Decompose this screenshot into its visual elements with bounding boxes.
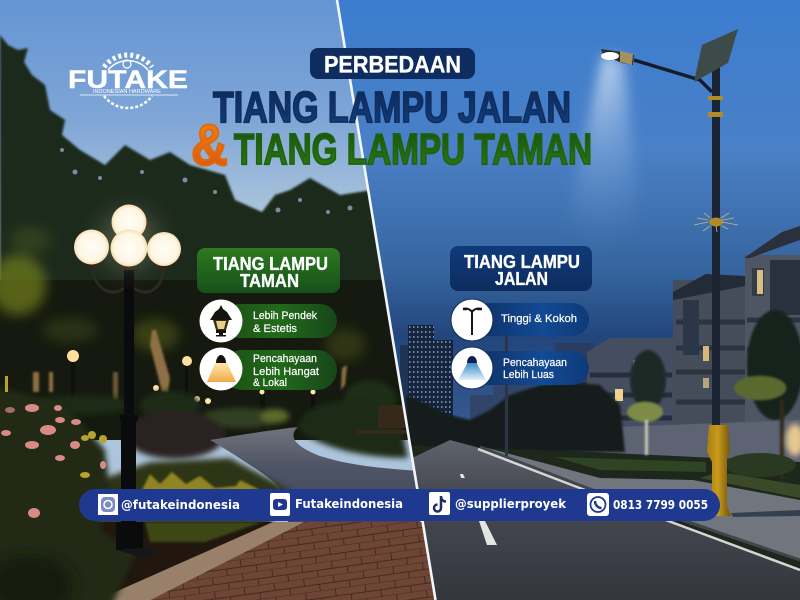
second street pole in distance — [505, 336, 508, 456]
beam of light — [574, 48, 636, 219]
curved garden path — [210, 427, 420, 525]
perimeter wall — [590, 420, 800, 462]
logo wordmark: FUTAKE — [68, 66, 188, 94]
taman row: lebih pendek — [200, 300, 337, 342]
title ampersand: & — [191, 113, 228, 178]
jalan row: tinggi — [451, 299, 589, 341]
lamp head — [601, 49, 634, 65]
sidewalk — [480, 446, 800, 560]
glowing globes — [74, 204, 181, 270]
distant skyline — [400, 325, 595, 430]
front apartment building — [744, 226, 800, 440]
icon: street pole — [463, 309, 482, 335]
foreground trees — [627, 310, 800, 480]
lane dashes — [460, 474, 497, 545]
jalan header: JALAN — [495, 269, 548, 289]
whatsapp contact: 0813 7799 0055 — [613, 497, 708, 512]
logo gear — [80, 55, 178, 108]
instagram contact — [98, 494, 240, 515]
taman header: TIANG LAMPU — [213, 254, 328, 274]
spider ornament — [694, 213, 738, 232]
soil bed — [96, 522, 273, 593]
tall apartment building — [673, 274, 745, 440]
asphalt road — [412, 440, 800, 600]
taman row: pencahayaan: & Lokal — [253, 377, 287, 389]
mid apartment building — [587, 338, 673, 427]
tiktok contact — [429, 492, 567, 515]
taman row: pencahayaan: Lebih Hangat — [253, 366, 319, 378]
lamp arm — [634, 60, 712, 92]
road edge line — [478, 449, 800, 570]
solar street lamp — [601, 29, 800, 517]
yellow flower sprigs — [5, 376, 107, 478]
jalan row: tinggi: Tinggi & Kokoh — [501, 313, 577, 325]
lower dark foliage — [0, 280, 420, 440]
sky gaps in the canopy — [60, 148, 352, 214]
icon: warm light cone — [207, 355, 236, 382]
panel: Tiang Lampu Taman — [197, 248, 340, 390]
taman row: pencahayaan: Pencahayaan — [253, 353, 317, 365]
panel: street photo background — [330, 0, 800, 600]
flower bush — [0, 385, 135, 600]
gold base — [707, 425, 731, 516]
instagram contact: @futakeindonesia — [121, 497, 240, 512]
contact bar — [79, 489, 720, 521]
yellow bush highlights — [141, 471, 260, 489]
far trees — [406, 382, 625, 452]
hedges — [30, 380, 396, 459]
icon: cool light cone — [458, 356, 486, 380]
jalan header — [450, 246, 592, 291]
walkway curb — [97, 522, 304, 600]
title line 2: TIANG LAMPU TAMAN — [234, 125, 592, 174]
taman header: TAMAN — [240, 271, 299, 291]
tree canopy silhouette — [0, 34, 382, 280]
shrubs right of path — [298, 401, 408, 458]
curb — [480, 447, 800, 560]
pink flowers — [1, 404, 106, 518]
jalan row: pencahayaan: Pencahayaan — [503, 357, 567, 369]
youtube contact: Futakeindonesia — [295, 496, 403, 511]
panel: Tiang Lampu Jalan — [450, 246, 592, 389]
pole — [712, 62, 720, 427]
ground base — [412, 446, 800, 569]
whatsapp contact — [587, 493, 708, 516]
garden bench — [358, 405, 407, 434]
logo tagline: INDONESIAN HARDWARE — [93, 89, 162, 95]
jalan header: TIANG LAMPU — [464, 252, 580, 272]
tree trunks and park glow — [33, 330, 347, 400]
taman row: lebih pendek: & Estetis — [253, 323, 298, 335]
foliage behind pole — [100, 458, 290, 525]
taman row: pencahayaan — [200, 348, 337, 390]
lawn and shrubs — [555, 453, 800, 498]
jalan row: pencahayaan: Lebih Luas — [503, 369, 554, 381]
taman row: lebih pendek: Lebih Pendek — [253, 310, 317, 322]
title line 1: TIANG LAMPU JALAN — [213, 83, 571, 132]
solar panel — [694, 29, 738, 82]
tiktok contact: @supplierproyek — [455, 496, 567, 511]
taman header — [197, 248, 340, 293]
logo: Futake — [68, 55, 188, 108]
brick walkway — [150, 522, 440, 600]
diagonal divider — [337, 0, 436, 600]
icon: lantern — [210, 305, 232, 336]
panel: garden photo background — [0, 0, 440, 600]
jalan row: pencahayaan — [451, 347, 589, 389]
park background lamps — [67, 350, 316, 406]
heading pill: Perbedaan: PERBEDAAN — [324, 52, 461, 78]
sunlit leaves on left tree — [0, 226, 365, 361]
garden lamp — [74, 204, 181, 558]
youtube contact — [270, 493, 403, 516]
gold collars — [708, 96, 723, 226]
